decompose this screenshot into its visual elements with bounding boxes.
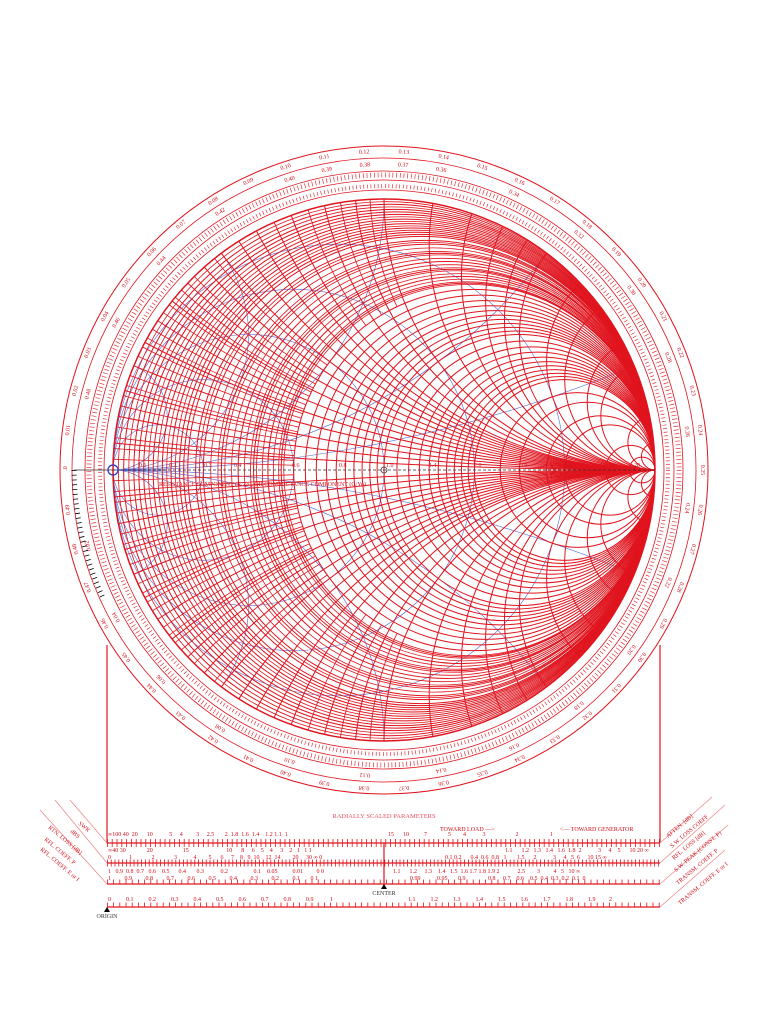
ring labels: 0.12 — [359, 150, 370, 154]
ring labels: 0.02 — [72, 386, 78, 396]
origin marker — [96, 907, 118, 920]
ring labels: 0.37 — [398, 786, 410, 790]
scale numbers: 1.1 1.2 1.3 1.4 1.5 1.6 1.7 1.8 1.9 2 — [408, 897, 612, 903]
ring labels: 0.40 — [280, 770, 290, 776]
bottom scales — [40, 797, 728, 907]
ring labels: 0.30 — [638, 652, 646, 662]
ring labels: 0.40 — [284, 175, 296, 184]
scale numbers: 0 1 2 3 4 5 6 7 8 9 10 12 14 20 30 ∞ 0 — [108, 855, 322, 861]
ring labels: 0.39 — [321, 166, 333, 174]
axis numbers: 20 — [634, 463, 640, 469]
scale numbers: 1 0.9 0.8 0.7 0.6 0.5 0.4 0.3 0.2 0.1 0 1 — [108, 876, 318, 882]
ring labels: 0.08 — [208, 196, 218, 205]
ring labels: 0.36 — [438, 780, 449, 786]
axis numbers: 0.3 — [204, 463, 212, 469]
ring labels: 0.38 — [359, 162, 370, 169]
ring labels: 0.28 — [677, 582, 684, 592]
ring labels: 0.32 — [572, 229, 584, 241]
ring labels: 0.14 — [435, 766, 447, 774]
ring labels: 0.27 — [690, 544, 696, 555]
right scale labels: S.W. PEAK (CONST. P) — [673, 830, 723, 874]
ring labels: 0.01 — [65, 425, 72, 436]
ring labels: 0.26 — [683, 426, 690, 437]
axis numbers: 0.6 — [292, 463, 300, 469]
ring labels: 0.30 — [625, 285, 636, 297]
ring labels: 0.26 — [698, 504, 703, 515]
ring labels: 0.34 — [508, 189, 520, 199]
ring labels: 0.04 — [112, 611, 122, 623]
scale numbers: 1.1 1.2 1.3 1.4 1.5 1.6 1.7 1.8 1.9 2 2.5 3 4 5 10 ∞ — [393, 869, 580, 875]
ring labels: 0.42 — [215, 207, 227, 218]
ring labels: 0.46 — [100, 618, 108, 628]
scale numbers: TOWARD LOAD —> — [440, 827, 495, 833]
ring labels: 0.24 — [683, 503, 690, 514]
right scale labels: ATTEN. [dB] — [665, 814, 695, 840]
axis numbers: 0.4 — [234, 463, 242, 469]
black tick scale left — [74, 470, 104, 600]
ring labels: 0.06 — [147, 246, 156, 256]
ring labels: 0.42 — [208, 735, 218, 744]
ring labels: 0.08 — [215, 722, 227, 733]
axis numbers: 0.2 — [169, 463, 176, 469]
ring labels: 0.28 — [663, 352, 672, 364]
fine mesh left — [114, 200, 638, 740]
ring labels: 0.45 — [121, 651, 132, 663]
right scale labels: RFL. LOSS [dB] — [671, 830, 707, 862]
left scale labels: RFL. COEFF. P — [43, 837, 77, 867]
ring labels: 0.05 — [121, 277, 132, 289]
left scale labels: dBS — [69, 829, 80, 840]
axis numbers: 3.0 — [520, 463, 528, 469]
side drop lines — [107, 645, 660, 884]
axis numbers — [139, 463, 640, 469]
ring labels: 0.07 — [175, 219, 187, 231]
ring labels: 0.0 — [63, 466, 68, 470]
ring labels: 0.43 — [175, 709, 187, 721]
axis numbers: 1.4 — [429, 463, 436, 469]
axis numbers: 2.0 — [474, 463, 482, 469]
ring labels: 0.47 — [84, 581, 93, 593]
ring labels: 0.44 — [146, 684, 156, 693]
left scale labels: RTN. LOSS [dB] — [47, 825, 83, 856]
scale numbers: 0.99 0.95 0.9 0.8 0.7 0.6 0.5 0.4 0.3 0.2 0.1 0 — [410, 876, 586, 882]
left scale labels: SWR — [77, 821, 91, 834]
scale numbers: 0.1 0.2 0.4 0.6 0.8 1 1.5 2 3 4 5 6 10 15 ∞ — [445, 855, 607, 861]
origin marker: ORIGIN — [96, 914, 118, 920]
ring labels: 0.16 — [514, 178, 525, 185]
ring labels: 0.17 — [550, 196, 560, 204]
scales title: RADIALLY SCALED PARAMETERS — [332, 813, 436, 820]
admittance grid — [114, 200, 626, 740]
ring labels: 0.35 — [477, 770, 488, 777]
ring labels: 0.32 — [582, 712, 592, 720]
axis label: RESISTANCE COMPONENT (R/Zo), OR CONDUCTANCE COMPONENT (G/Yo) — [159, 481, 366, 488]
ring labels: 0.39 — [319, 780, 330, 786]
ring labels: 0.14 — [438, 154, 449, 160]
ring labels: 0.46 — [112, 317, 122, 329]
axis numbers: 1.0 — [386, 463, 394, 469]
right scale labels — [665, 814, 729, 907]
horizontal axis — [113, 469, 655, 471]
left scale labels: RFL. COEFF. E or I — [39, 847, 80, 883]
ring labels: 0.37 — [398, 162, 409, 169]
scale numbers: 0 0.1 0.2 0.3 0.4 0.5 0.6 0.7 0.8 0.9 1 — [108, 897, 333, 903]
ring labels: 0.29 — [660, 618, 668, 628]
axis numbers: 0.1 — [139, 463, 146, 469]
ring labels: 0.18 — [582, 220, 592, 228]
axis numbers: 10 — [609, 463, 615, 469]
ring labels: 0.48 — [84, 388, 93, 400]
ring labels: 0.04 — [100, 311, 108, 322]
right scale labels: TRANSM. COEFF. P — [675, 848, 720, 887]
smith chart — [60, 146, 708, 794]
ring labels: 0.15 — [478, 164, 488, 170]
scale numbers — [108, 827, 649, 903]
center marker: CENTER — [372, 891, 396, 897]
ring labels: 0.49 — [65, 504, 72, 515]
ring labels: 0.38 — [359, 786, 370, 790]
ring labels: 0.25 — [700, 465, 705, 475]
ring labels: 0.09 — [243, 177, 255, 187]
ring labels: 0.03 — [84, 347, 93, 359]
grid — [112, 198, 656, 742]
axis markers — [108, 465, 118, 475]
ring labels: 0.20 — [638, 278, 646, 288]
ring labels — [63, 150, 705, 790]
scale numbers: ∞100 40 20 10 5 4 3 2.5 2 1.8 1.6 1.4 1.2 1.1 1 — [108, 832, 288, 838]
ring labels: 0.36 — [435, 166, 447, 174]
ring labels: 0.33 — [550, 735, 560, 744]
axis numbers: 5.0 — [564, 463, 572, 469]
right scale labels: S.W. LOSS COEFF — [669, 814, 710, 850]
ring labels: 0.23 — [690, 386, 696, 396]
ring labels: 0.22 — [663, 576, 672, 588]
right scale labels: TRANSM. COEFF. E or I — [677, 862, 729, 907]
scale numbers: 1 0.9 0.8 0.7 0.6 0.5 0.4 0.3 0.2 0.1 0.05 0.01 0 0 — [108, 869, 324, 875]
ring labels: 0.22 — [677, 348, 684, 358]
ring labels: 0.48 — [72, 544, 78, 554]
ring labels: 0.24 — [698, 425, 703, 436]
ring labels: 0.10 — [280, 164, 290, 170]
ring labels: 0.21 — [660, 312, 668, 322]
ring labels: 0.13 — [398, 150, 409, 154]
outer rings — [60, 146, 708, 794]
scale numbers: 1.1 1.2 1.3 1.4 1.6 1.8 2 3 4 5 10 20 ∞ — [505, 848, 649, 854]
ring labels: 0.44 — [156, 255, 167, 267]
ring labels: 0.41 — [243, 753, 255, 763]
ring labels: 0.19 — [612, 247, 621, 256]
ring labels: 0.20 — [625, 643, 636, 655]
left scale labels — [39, 821, 91, 883]
scale numbers: ∞40 30 20 15 10 8 6 5 4 3 2 1 1 1 — [108, 848, 312, 854]
ring labels: 0.31 — [612, 684, 621, 693]
ring labels: 0.18 — [572, 699, 584, 711]
scale numbers: <— TOWARD GENERATOR — [560, 827, 633, 833]
center marker — [372, 884, 396, 897]
ring labels: 0.10 — [284, 756, 296, 765]
ring labels: 0.11 — [319, 154, 330, 160]
ring labels: 0.16 — [508, 741, 520, 751]
axis numbers: 0.8 — [339, 463, 346, 469]
ring labels: 0.02 — [84, 540, 93, 552]
ring labels: 0.12 — [359, 771, 370, 778]
impedance grid — [115, 200, 654, 740]
ring labels: 0.34 — [514, 755, 525, 762]
scale numbers: 15 10 7 5 4 3 2 1 — [388, 832, 553, 838]
ring labels: 0.06 — [156, 673, 167, 685]
